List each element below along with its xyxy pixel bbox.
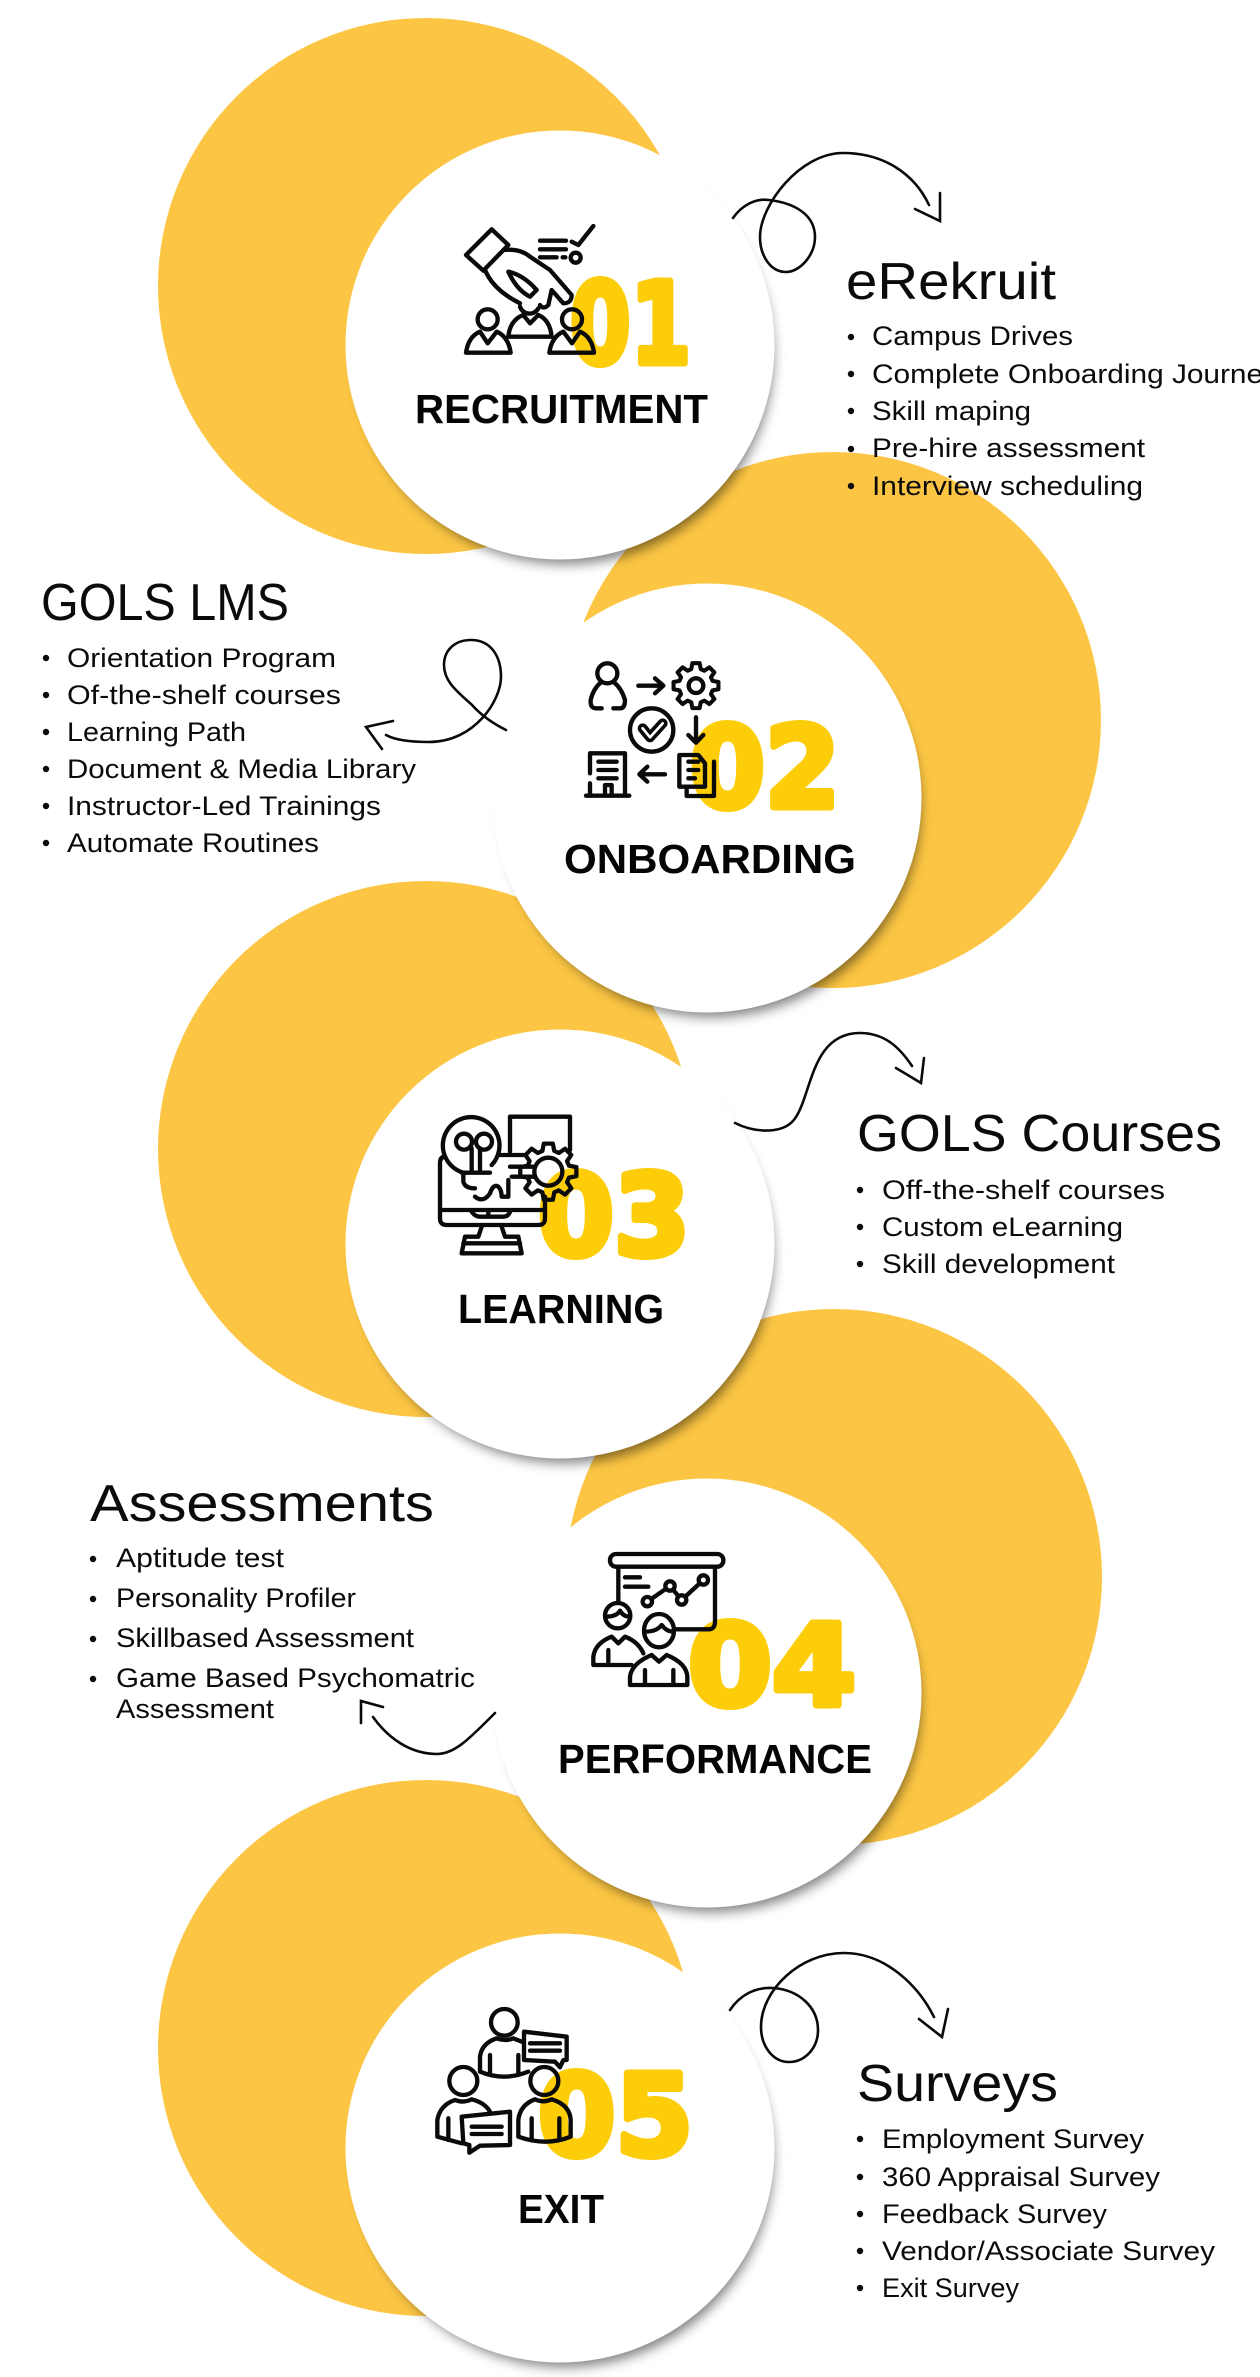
list: Surveys features: 360 Appraisal Survey [882, 2162, 1161, 2192]
icon: learning monitor with bulb and gear [440, 1117, 576, 1253]
list: GOLS LMS features: Of-the-shelf courses [67, 680, 341, 710]
heading: eRekruit: eRekruit [846, 253, 1057, 311]
label: recruitment: RECRUITMENT [415, 386, 708, 432]
arrow: onboarding to GOLS LMS [366, 640, 506, 749]
icon: performance presentation [593, 1554, 723, 1685]
list: GOLS LMS features: Learning Path [67, 717, 246, 747]
arrow: performance to assessments [361, 1701, 495, 1754]
list: GOLS Courses features [857, 1175, 1165, 1279]
number 01: 01 [570, 260, 691, 390]
number 04: 04 [688, 1602, 856, 1732]
list: eRekruit features: Complete Onboarding Journey [872, 359, 1260, 389]
icon: exit conversation [437, 2009, 571, 2153]
yellow circle: learning [158, 881, 694, 1417]
list: Surveys features: Exit Survey [882, 2273, 1019, 2303]
heading: GOLS LMS: GOLS LMS [41, 574, 289, 632]
list: GOLS Courses features: Off-the-shelf courses [882, 1175, 1165, 1205]
list: GOLS LMS features [43, 643, 417, 858]
list: GOLS Courses features: Custom eLearning [882, 1212, 1123, 1242]
list: Assessments features: Assessment [116, 1694, 275, 1724]
list: Assessments features: Game Based Psychomatric [116, 1663, 475, 1693]
number 05: 05 [538, 2052, 693, 2182]
heading: GOLS Courses: GOLS Courses [857, 1105, 1222, 1163]
list: Surveys features: Vendor/Associate Survey [882, 2236, 1216, 2266]
white circle: exit [346, 1934, 774, 2367]
icon: onboarding process [586, 663, 718, 796]
yellow circle: recruitment [158, 18, 694, 554]
list: Assessments features: Aptitude test [116, 1543, 285, 1573]
list: GOLS LMS features: Automate Routines [67, 828, 319, 858]
heading: Surveys: Surveys [857, 2055, 1058, 2113]
number 03: 03 [538, 1152, 690, 1282]
list: Surveys features: Employment Survey [882, 2124, 1145, 2154]
yellow circle: exit [158, 1780, 694, 2316]
label: performance: PERFORMANCE [558, 1736, 872, 1782]
list: Surveys features [857, 2124, 1216, 2303]
list: GOLS LMS features: Instructor-Led Trainings [67, 791, 381, 821]
list: eRekruit features: Interview scheduling [872, 471, 1143, 501]
list: eRekruit features: Campus Drives [872, 321, 1073, 351]
label: exit: EXIT [518, 2186, 604, 2232]
list: Assessments features: Skillbased Assessment [116, 1623, 415, 1653]
list: Assessments features: Personality Profiler [116, 1583, 356, 1613]
list: eRekruit features: Pre-hire assessment [872, 433, 1146, 463]
icon: hand selecting candidate [466, 226, 594, 353]
list: eRekruit features [848, 321, 1260, 501]
list: GOLS LMS features: Document & Media Library [67, 754, 417, 784]
white circle: recruitment [346, 130, 774, 564]
white circle: performance [492, 1478, 922, 1912]
arrow: learning to GOLS Courses [735, 1033, 924, 1131]
number 02: 02 [690, 704, 840, 834]
arrow: recruitment to eRekruit [733, 153, 940, 272]
list: GOLS LMS features: Orientation Program [67, 643, 336, 673]
yellow circle: onboarding [565, 452, 1101, 988]
arrow: exit to surveys [730, 1953, 948, 2062]
list: eRekruit features: Skill maping [872, 396, 1031, 426]
heading: Assessments: Assessments [90, 1475, 434, 1533]
list: GOLS Courses features: Skill development [882, 1249, 1116, 1279]
label: learning: LEARNING [458, 1286, 664, 1332]
white circle: onboarding [492, 584, 922, 1017]
list: Assessments features [90, 1543, 475, 1724]
yellow circle: performance [566, 1309, 1102, 1845]
list: Surveys features: Feedback Survey [882, 2199, 1108, 2229]
white circle: learning [346, 1030, 774, 1463]
label: onboarding: ONBOARDING [564, 836, 856, 882]
